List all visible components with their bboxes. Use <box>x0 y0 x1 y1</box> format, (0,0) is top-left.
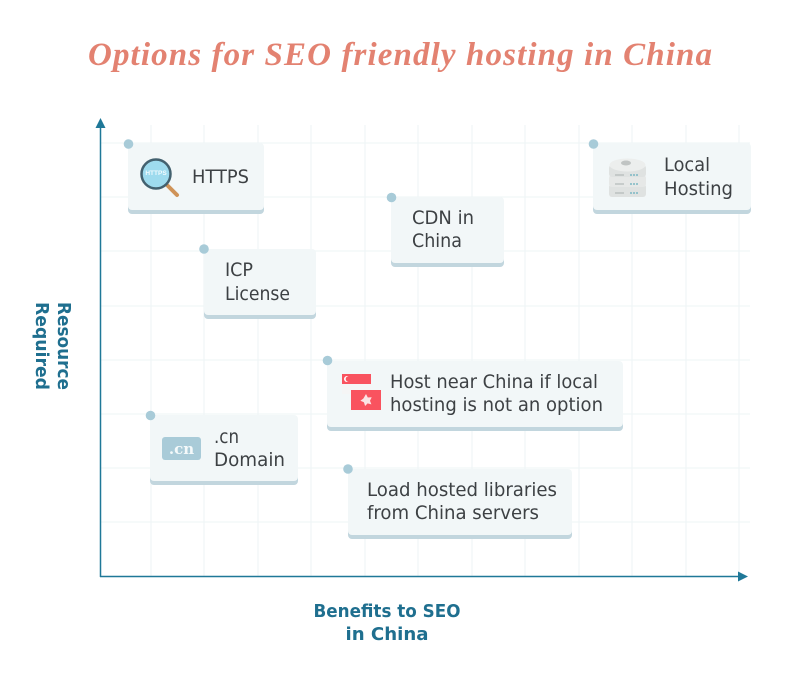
y axis label <box>31 302 74 390</box>
card: .cn Domain: .cn <box>214 426 239 448</box>
icon: magnifying glass: HTTPS <box>145 170 167 177</box>
card: ICP License: License <box>225 283 290 305</box>
card: HTTPS <box>124 139 264 214</box>
card: ICP License: ICP <box>225 259 253 281</box>
title: Options for SEO friendly hosting in China <box>88 37 712 73</box>
card: CDN in China: CDN in <box>412 207 474 229</box>
y axis arrow <box>96 118 106 577</box>
card: CDN in China: China <box>412 230 462 252</box>
y axis label: Required <box>31 302 52 390</box>
card: CDN in China <box>387 193 504 267</box>
card: Load hosted libraries: Load hosted libraries <box>367 479 557 501</box>
icon: magnifying glass <box>142 160 177 195</box>
x axis arrow <box>100 572 748 582</box>
icon: server stack <box>609 158 646 197</box>
card: Host near China <box>323 356 623 431</box>
icon: Singapore and Hong Kong flags <box>342 374 381 410</box>
card: Load hosted libraries: from China servers <box>367 502 539 524</box>
x axis label: Benefits to SEO <box>314 601 460 622</box>
y axis label: Resource <box>53 302 74 390</box>
card: .cn Domain <box>146 411 298 485</box>
card: Load hosted libraries <box>343 464 572 539</box>
card: Local Hosting: Hosting <box>664 178 733 200</box>
card: Host near China: Host near China if local <box>390 371 598 393</box>
card: ICP License <box>199 244 316 319</box>
card: Host near China: hosting is not an option <box>390 394 603 416</box>
card: Local Hosting: Local <box>664 154 710 176</box>
card: HTTPS: HTTPS <box>192 166 249 188</box>
x axis label <box>314 601 460 645</box>
icon: .cn badge: .cn <box>169 440 194 458</box>
card: Local Hosting <box>589 139 751 214</box>
card: .cn Domain: Domain <box>214 449 285 471</box>
icon: .cn badge <box>162 437 201 460</box>
x axis label: in China <box>346 624 428 645</box>
